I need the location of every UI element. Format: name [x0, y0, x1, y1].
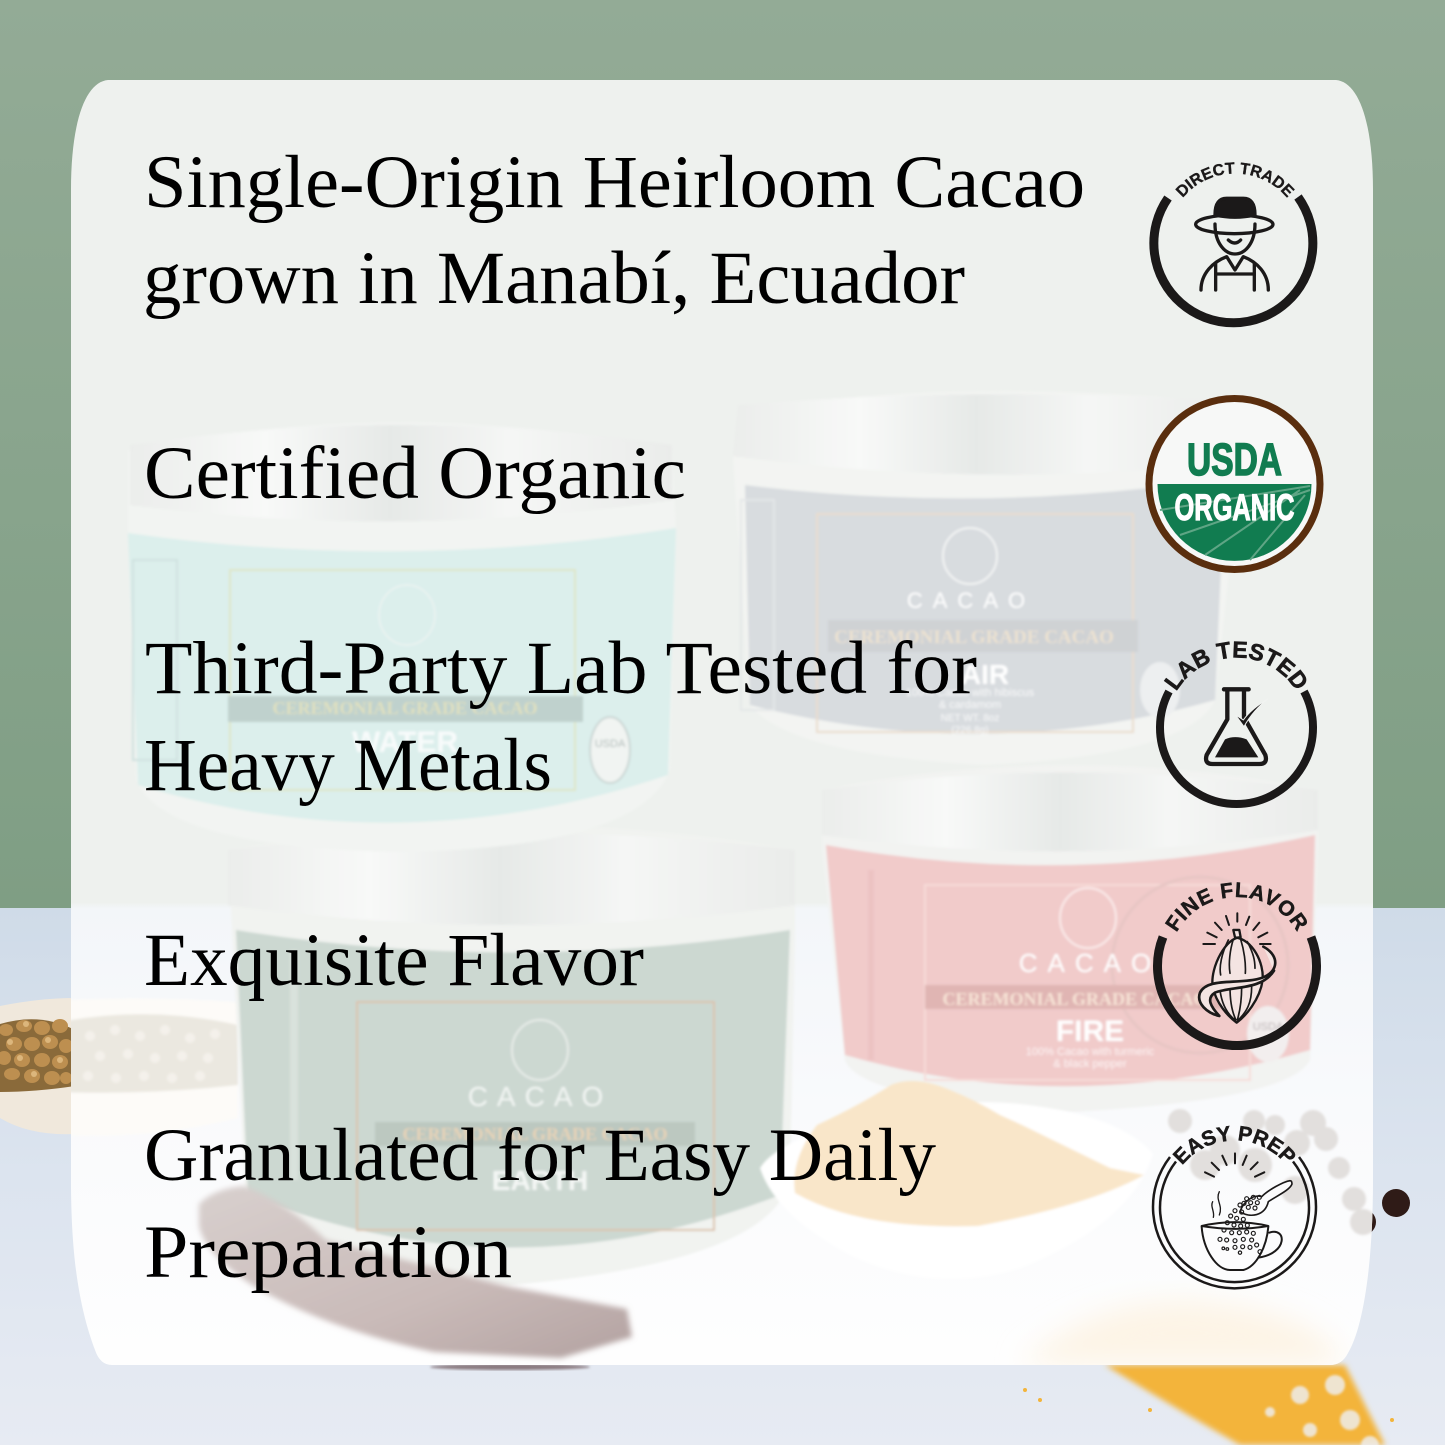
icon: lab tested flask badge	[1156, 641, 1317, 808]
icon: easy prep cup badge: EASY PREP	[1172, 1126, 1296, 1165]
faded product photo seen through panel	[60, 391, 1376, 1365]
icon: direct trade farmer badge: DIRECT TRADE	[1175, 162, 1295, 198]
icon: direct trade farmer badge	[1149, 162, 1318, 328]
jar: air: & cardamom	[939, 699, 1001, 711]
text: certified organic: Certified Organic	[144, 432, 686, 515]
jar: air: (226.8g)	[951, 725, 989, 736]
chilli	[199, 1186, 632, 1358]
jar: earth: CACAO	[468, 1081, 612, 1112]
jar: fire: 100% Cacao with turmeric	[1026, 1046, 1155, 1058]
jar: water	[128, 422, 676, 852]
turmeric powder	[1023, 1365, 1394, 1445]
jar: water: CEREMONIAL GRADE CACAO	[272, 698, 538, 718]
chilli shadow	[430, 1364, 590, 1370]
jar: fire: & black pepper	[1053, 1058, 1127, 1070]
jar: earth: EARTH	[492, 1165, 588, 1196]
jar: air: 100% Cacao with hibiscus	[906, 687, 1035, 699]
jar: fire: USDA	[1253, 1021, 1284, 1033]
jar: air: AIR	[961, 659, 1009, 690]
jar: fire: CACAO	[1019, 948, 1161, 978]
faded peppercorns	[1168, 1109, 1376, 1235]
bowl with powder	[759, 1080, 1144, 1228]
text: granulated for easy daily preparation: Granulated for Easy Daily	[144, 1114, 936, 1197]
jar: fire: FIRE	[1056, 1015, 1124, 1048]
text: single-origin heirloom cacao	[143, 141, 1085, 320]
jar: air: CACAO	[907, 588, 1035, 613]
jar: water: USDA	[595, 738, 626, 750]
faded turmeric	[1020, 1300, 1345, 1365]
jar: air: CEREMONIAL GRADE CACAO	[834, 627, 1114, 648]
text: exquisite flavor: Exquisite Flavor	[144, 919, 644, 1002]
text: third-party lab tested: Heavy Metals	[144, 724, 552, 807]
text: single-origin heirloom cacao: Single-Origin Heirloom Cacao	[144, 141, 1085, 224]
icon: usda organic seal: USDA	[1187, 434, 1282, 485]
icon: fine flavor cacao badge	[1153, 882, 1321, 1050]
jar: air	[745, 398, 1221, 734]
icon: fine flavor cacao badge: FINE FLAVOR	[1164, 882, 1307, 932]
text: granulated for easy daily preparation	[144, 1114, 936, 1294]
faded bowl with seeds	[71, 1014, 238, 1094]
peppercorn	[1350, 1189, 1410, 1235]
icon: lab tested flask badge: LAB TESTED	[1164, 641, 1306, 691]
text: single-origin heirloom cacao: grown in Manabí, Ecuador	[143, 237, 965, 320]
text: third-party lab tested	[144, 627, 977, 807]
icon: usda organic seal: ORGANIC	[1174, 487, 1294, 528]
jar: earth	[228, 825, 795, 1285]
jar: earth: CEREMONIAL GRADE CACAO	[402, 1124, 668, 1144]
coriander bowl	[0, 998, 75, 1134]
text: granulated for easy daily preparation: Preparation	[144, 1211, 512, 1294]
jar: air: NET WT. 8oz	[941, 713, 999, 724]
text: third-party lab tested: Third-Party Lab Tested for	[145, 627, 977, 710]
icon: easy prep cup badge	[1152, 1126, 1318, 1290]
jar: fire: CEREMONIAL GRADE CACAO	[942, 989, 1208, 1009]
icon: usda organic seal	[1149, 398, 1320, 570]
jar: fire	[822, 765, 1318, 1112]
jar: water: WATER	[352, 726, 458, 759]
